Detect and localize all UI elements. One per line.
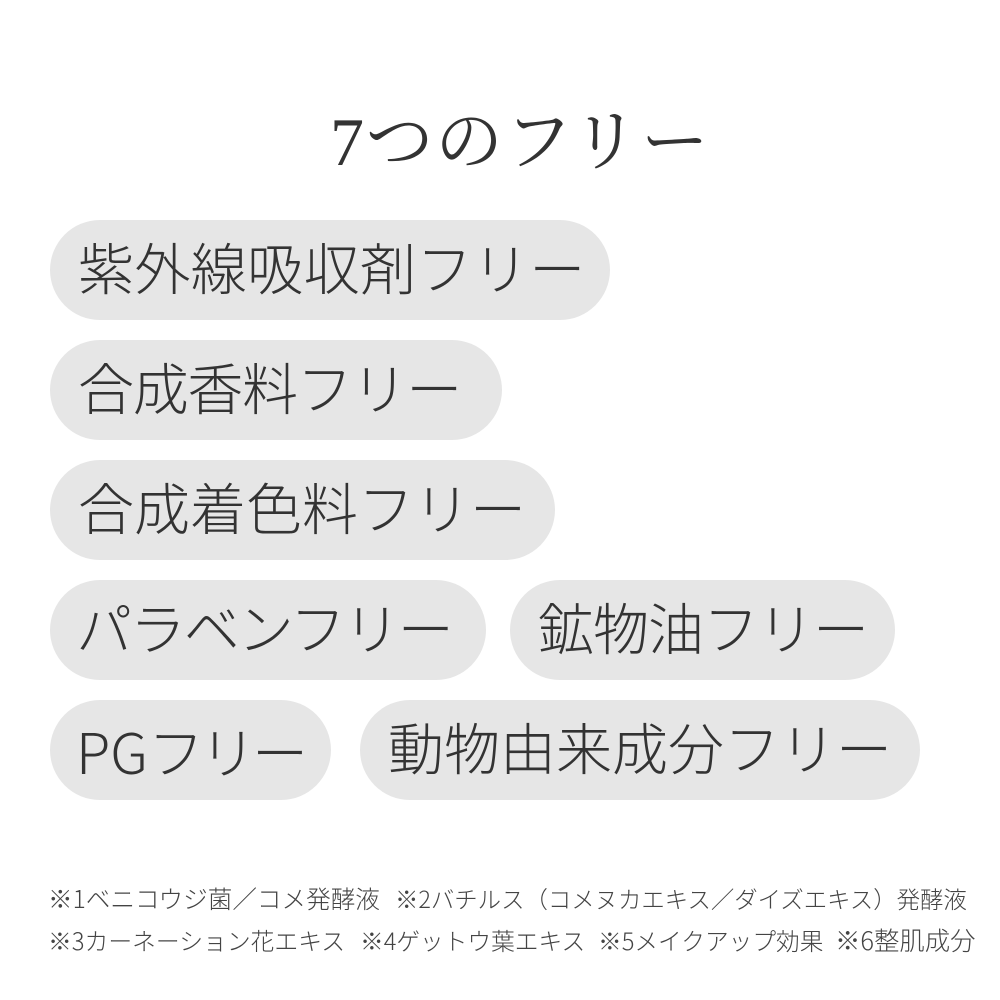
pill: synthetic colorant free: 合成着色料フリー [78,479,526,542]
pill: synthetic colorant free [50,460,555,560]
pill: mineral oil free: 鉱物油フリー [538,599,868,662]
pill: animal-derived ingredient free [360,700,920,800]
pill: UV absorber free [50,220,610,320]
footnote line 2: ※4ゲットウ葉エキス [360,923,585,957]
pill: synthetic fragrance free [50,340,502,440]
pill: mineral oil free [510,580,895,680]
footnote line 2: ※5メイクアップ効果 [598,923,823,957]
footnote line 2 [48,922,976,958]
footnote line 1: ※1ベニコウジ菌／コメ発酵液 [48,880,380,916]
pill: PG free [50,700,331,800]
pill: UV absorber free: 紫外線吸収剤フリー [78,239,586,302]
pill: animal-derived ingredient free: 動物由来成分フリー [388,719,892,782]
footnote line 1 [48,880,967,916]
footnote line 2: ※3カーネーション花エキス [48,922,345,957]
footnote line 1: ※2バチルス（コメヌカエキス／ダイズエキス）発酵液 [395,881,967,915]
pill: paraben free: パラベンフリー [76,599,452,662]
pill: PG free: PGフリー [76,710,304,791]
title: 7つのフリー [330,104,710,180]
pill: synthetic fragrance free: 合成香料フリー [78,359,461,422]
pill: paraben free [50,580,486,680]
footnote line 2: ※6整肌成分 [835,922,976,958]
